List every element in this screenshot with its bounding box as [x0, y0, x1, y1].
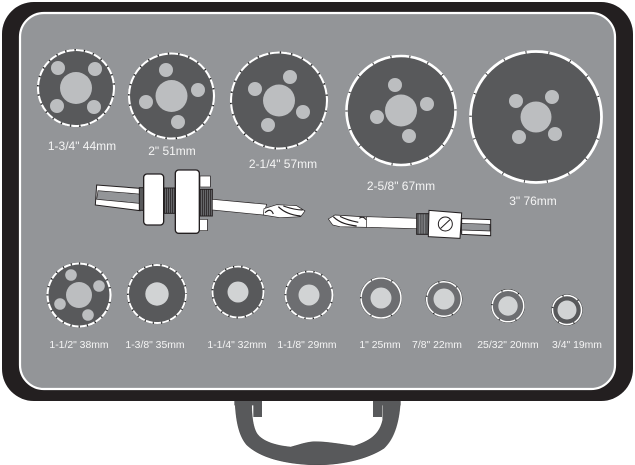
small hole saw 7/8" [426, 281, 462, 317]
label: 1-3/8" 35mm [125, 340, 185, 351]
small hole saw 1-1/4" [212, 266, 264, 318]
small hole saw 1-1/8" [285, 271, 333, 319]
label: 25/32" 20mm [477, 340, 539, 351]
label: 2-1/4" 57mm [249, 157, 317, 171]
large arbor with drill [95, 170, 305, 233]
label: 1" 25mm [359, 340, 401, 351]
small hole saw 1" [360, 277, 402, 319]
small hole saw 25/32" [492, 290, 524, 322]
large hole saw 2-1/4" [230, 52, 328, 149]
label: 3/4" 19mm [552, 340, 602, 351]
small hole saw 1-3/8" [128, 264, 186, 324]
label: 1-1/2" 38mm [49, 340, 109, 351]
large hole saw 3" [470, 51, 602, 183]
label: 2" 51mm [148, 144, 196, 158]
small arbor with drill [328, 210, 491, 238]
small hole saw 1-1/2" [47, 263, 111, 327]
label: 1-1/8" 29mm [277, 340, 337, 351]
handle [234, 401, 401, 465]
large hole saw 2" [128, 53, 214, 139]
label: 2-5/8" 67mm [367, 179, 435, 193]
large hole saw 2-5/8" [346, 56, 456, 166]
tray panel [20, 13, 615, 389]
label: 1-1/4" 32mm [207, 340, 267, 351]
small hole saw 3/4" [552, 295, 582, 325]
label: 7/8" 22mm [412, 340, 462, 351]
large hole saw 1-3/4" [38, 50, 114, 126]
label: 3" 76mm [509, 194, 557, 208]
label: 1-3/4" 44mm [48, 139, 116, 153]
